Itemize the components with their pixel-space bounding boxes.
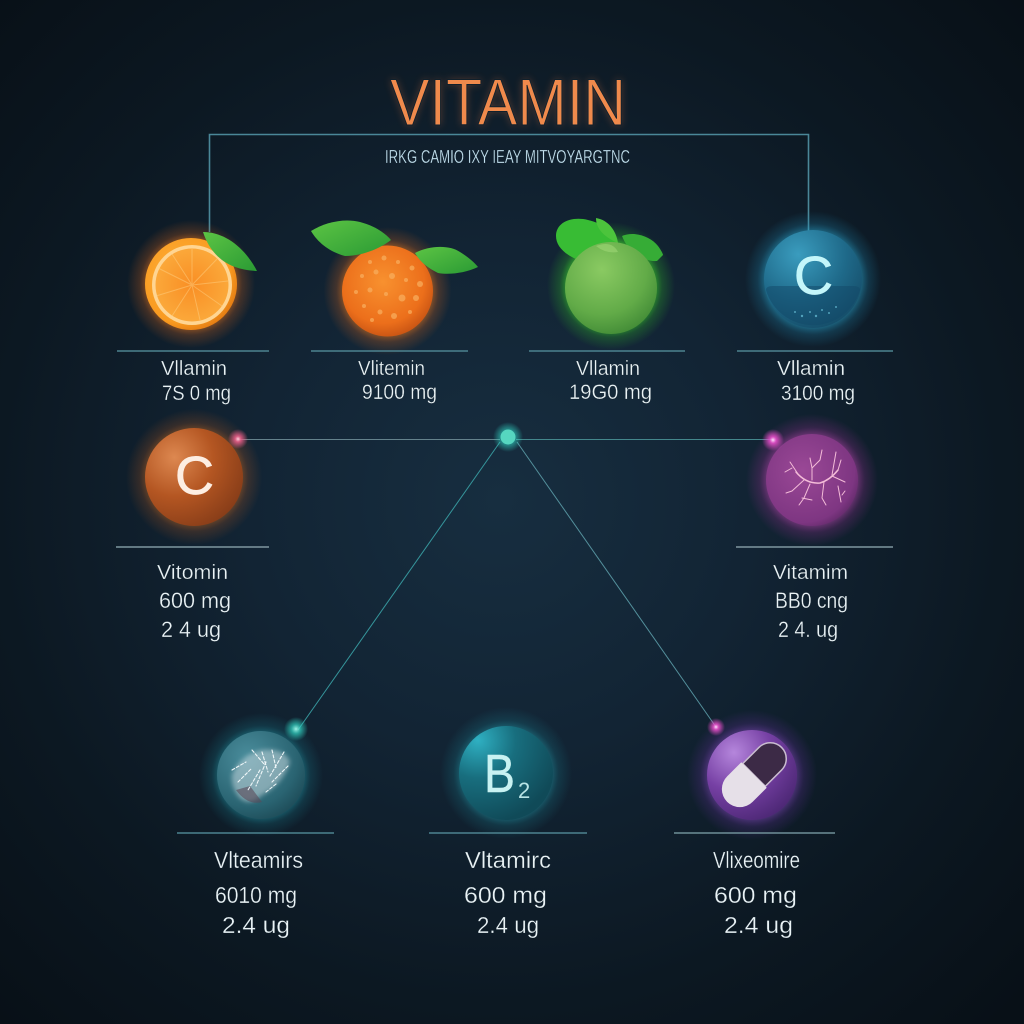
value 2: 2 4. ug xyxy=(778,617,838,642)
network lines xyxy=(238,440,773,730)
label: Vlteamirs xyxy=(214,847,303,873)
item: green apple xyxy=(529,218,685,404)
value: 7S 0 mg xyxy=(162,382,231,405)
value: 600 mg xyxy=(714,882,797,908)
item: brown C xyxy=(116,409,269,642)
divider xyxy=(737,350,893,352)
value: 19G0 mg xyxy=(569,381,652,404)
icon: green apple xyxy=(547,218,675,350)
value 2: 2.4 ug xyxy=(724,912,793,938)
subtitle: IRKG CAMIO IXY IEAY MITVOYARGTNC xyxy=(385,147,630,167)
divider xyxy=(117,350,269,352)
cyan node xyxy=(284,717,308,741)
value: 9100 mg xyxy=(362,381,437,404)
divider xyxy=(311,350,468,352)
label: Vlitemin xyxy=(358,358,425,380)
value: 600 mg xyxy=(464,882,547,908)
item: orange slice xyxy=(117,220,269,405)
label: Vitomin xyxy=(157,562,228,584)
central node xyxy=(493,422,523,452)
icon: teal crystal sphere xyxy=(199,713,323,837)
value 2: 2 4 ug xyxy=(161,617,221,642)
label: Vllamin xyxy=(576,358,640,380)
value: BB0 cng xyxy=(775,588,848,613)
icon: orange slice xyxy=(127,220,257,348)
item: purple sphere xyxy=(736,414,893,642)
item: capsule xyxy=(674,710,835,938)
icon: blue C sphere xyxy=(745,211,881,347)
divider xyxy=(177,832,334,834)
pink node xyxy=(228,429,248,449)
label: Vllamin xyxy=(777,358,845,380)
icon: blue C sphere: C xyxy=(794,246,833,306)
divider xyxy=(674,832,835,834)
violet node xyxy=(707,718,725,736)
bracket connector xyxy=(210,134,808,235)
label: Vltamirc xyxy=(465,847,551,873)
divider xyxy=(736,546,893,548)
divider xyxy=(529,350,685,352)
divider xyxy=(116,546,269,548)
value: 600 mg xyxy=(159,588,231,613)
value: 3100 mg xyxy=(781,382,855,405)
icon: brown C sphere: C xyxy=(175,446,214,506)
value 2: 2.4 ug xyxy=(222,912,290,938)
item: blue C xyxy=(737,211,893,405)
icon: brown C sphere xyxy=(126,409,262,545)
value 2: 2.4 ug xyxy=(477,912,539,938)
icon: purple branching sphere xyxy=(746,414,878,546)
title: VITAMIN xyxy=(390,65,626,139)
value: 6010 mg xyxy=(215,882,297,908)
icon: B2 sphere xyxy=(440,707,572,839)
label: Vllamin xyxy=(161,358,227,380)
item: whole orange xyxy=(311,220,478,404)
icon: B2 sphere: 2 xyxy=(518,778,530,803)
item: teal sphere xyxy=(177,713,334,938)
label: Vlixeomire xyxy=(713,847,800,873)
magenta node xyxy=(762,429,784,451)
divider xyxy=(429,832,587,834)
icon: whole orange xyxy=(311,220,478,355)
icon: capsule sphere xyxy=(687,710,817,840)
label: Vitamim xyxy=(773,562,848,584)
title: VITAMIN xyxy=(390,65,626,139)
item: B2 xyxy=(429,707,587,938)
icon: B2 sphere: B xyxy=(484,744,515,804)
